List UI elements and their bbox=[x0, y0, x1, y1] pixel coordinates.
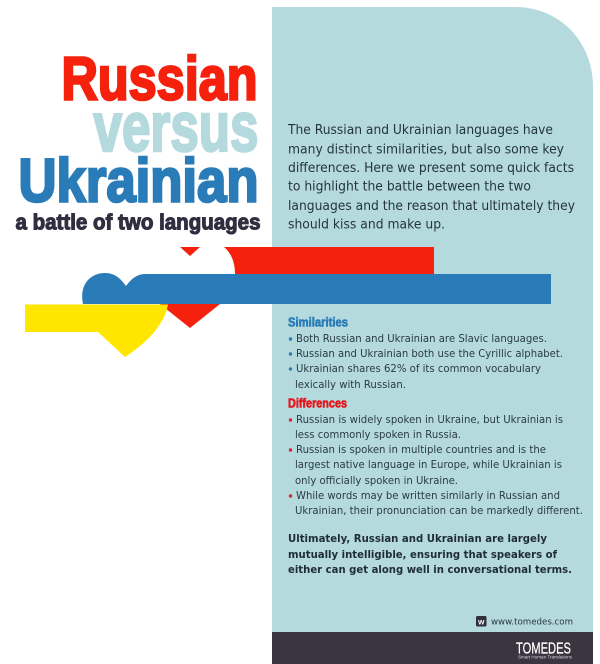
similarities text bbox=[295, 332, 563, 391]
illustration: hearts and flag bars bbox=[25, 247, 551, 357]
differences text: largest native language in Europe, while Ukrainian is bbox=[295, 458, 562, 471]
icon: w badge bbox=[476, 616, 486, 626]
differences text bbox=[295, 413, 583, 517]
intro text: The Russian and Ukrainian languages have bbox=[287, 123, 553, 138]
logo bbox=[516, 640, 573, 660]
title: Ukrainian: Ukrainian bbox=[18, 146, 258, 214]
conclusion text: either can get along well in conversational terms. bbox=[288, 563, 572, 576]
red notch of heart bbox=[180, 247, 200, 256]
website link: w bbox=[477, 618, 485, 626]
red heart lower tip bbox=[160, 304, 220, 328]
blue bar and heart bbox=[82, 273, 551, 304]
intro text: languages and the reason that ultimately they bbox=[288, 199, 575, 214]
intro text: many distinct similarities, but also some key bbox=[288, 142, 564, 158]
differences text: Russian is widely spoken in Ukraine, but Ukrainian is bbox=[296, 413, 563, 426]
panel: right background bbox=[272, 7, 593, 632]
similarities text: lexically with Russian. bbox=[295, 378, 406, 391]
red bar bbox=[224, 247, 434, 274]
differences section bbox=[288, 396, 583, 517]
website link bbox=[476, 616, 573, 628]
url: www.tomedes.com bbox=[491, 618, 573, 628]
intro text bbox=[287, 123, 575, 232]
similarities text: Russian and Ukrainian both use the Cyrillic alphabet. bbox=[296, 347, 563, 360]
differences text: Ukrainian, their pronunciation can be markedly different. bbox=[295, 504, 583, 517]
intro text: differences. Here we present some quick facts bbox=[288, 161, 574, 176]
conclusion text: mutually intelligible, ensuring that speakers of bbox=[288, 548, 557, 561]
subtitle: a battle of two languages bbox=[16, 210, 260, 234]
similarities text: Both Russian and Ukrainian are Slavic languages. bbox=[296, 332, 547, 345]
title: Russian: Russian bbox=[62, 44, 258, 112]
yellow bar and heart bbox=[25, 304, 168, 357]
differences text: only officially spoken in Ukraine. bbox=[295, 474, 458, 487]
bullets bbox=[289, 337, 292, 371]
similarities section bbox=[288, 316, 563, 391]
heading: similarities: Similarities bbox=[288, 316, 348, 330]
differences text: While words may be written similarly in Russian and bbox=[296, 489, 560, 502]
intro text: to highlight the battle between the two bbox=[288, 180, 531, 194]
logo wordmark: TOMEDES bbox=[516, 640, 571, 658]
logo tagline: Smart Human Translations bbox=[518, 654, 573, 660]
bullets bbox=[289, 418, 292, 498]
conclusion text bbox=[288, 532, 572, 576]
footer band bbox=[272, 632, 593, 664]
intro text: should kiss and make up. bbox=[288, 218, 445, 232]
similarities text: Ukrainian shares 62% of its common vocabulary bbox=[296, 362, 541, 375]
differences text: Russian is spoken in multiple countries and is the bbox=[296, 443, 546, 456]
title bbox=[16, 44, 260, 234]
heading: differences: Differences bbox=[288, 396, 347, 410]
title: versus: versus bbox=[94, 88, 258, 166]
differences text: less commonly spoken in Russia. bbox=[295, 428, 461, 441]
conclusion text: Ultimately, Russian and Ukrainian are largely bbox=[288, 532, 547, 545]
